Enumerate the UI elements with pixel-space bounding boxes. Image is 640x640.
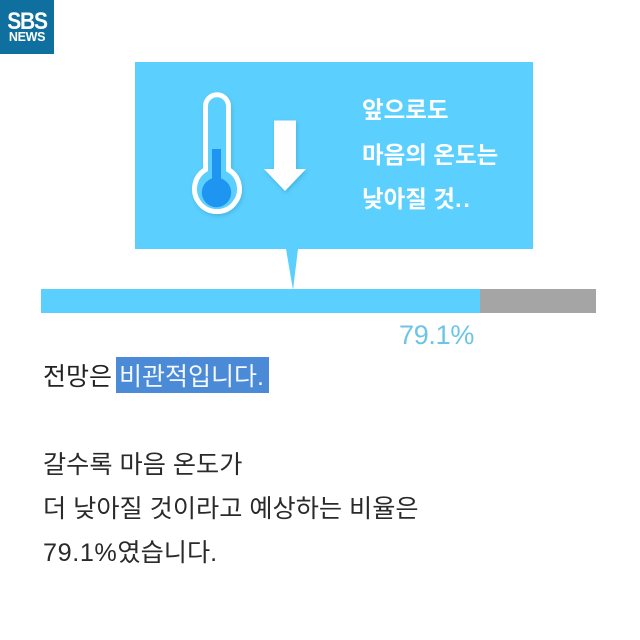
heading	[43, 357, 269, 393]
icon: thermometer	[192, 92, 244, 217]
callout text: 낮아질 것..	[362, 186, 472, 212]
body text	[43, 451, 419, 567]
callout text: 마음의 온도는	[362, 142, 498, 168]
callout panel with pointer	[135, 62, 533, 289]
bar label: 79.1%	[399, 320, 474, 350]
logo: SBS News	[0, 0, 54, 54]
heading: 전망은	[43, 363, 112, 391]
progress bar	[41, 289, 596, 313]
icon: down arrow	[264, 120, 306, 193]
logo: SBS News: NEWS	[9, 30, 45, 44]
logo: SBS News: SBS	[7, 8, 47, 35]
bar value 79.1%	[41, 289, 480, 313]
body text: 갈수록 마음 온도가	[43, 451, 242, 479]
callout text: 앞으로도	[362, 97, 448, 123]
body text: 79.1%였습니다.	[43, 539, 217, 567]
callout text	[362, 97, 498, 212]
body text: 더 낮아질 것이라고 예상하는 비율은	[43, 495, 419, 523]
highlighted phrase: 비관적입니다.	[119, 363, 264, 391]
